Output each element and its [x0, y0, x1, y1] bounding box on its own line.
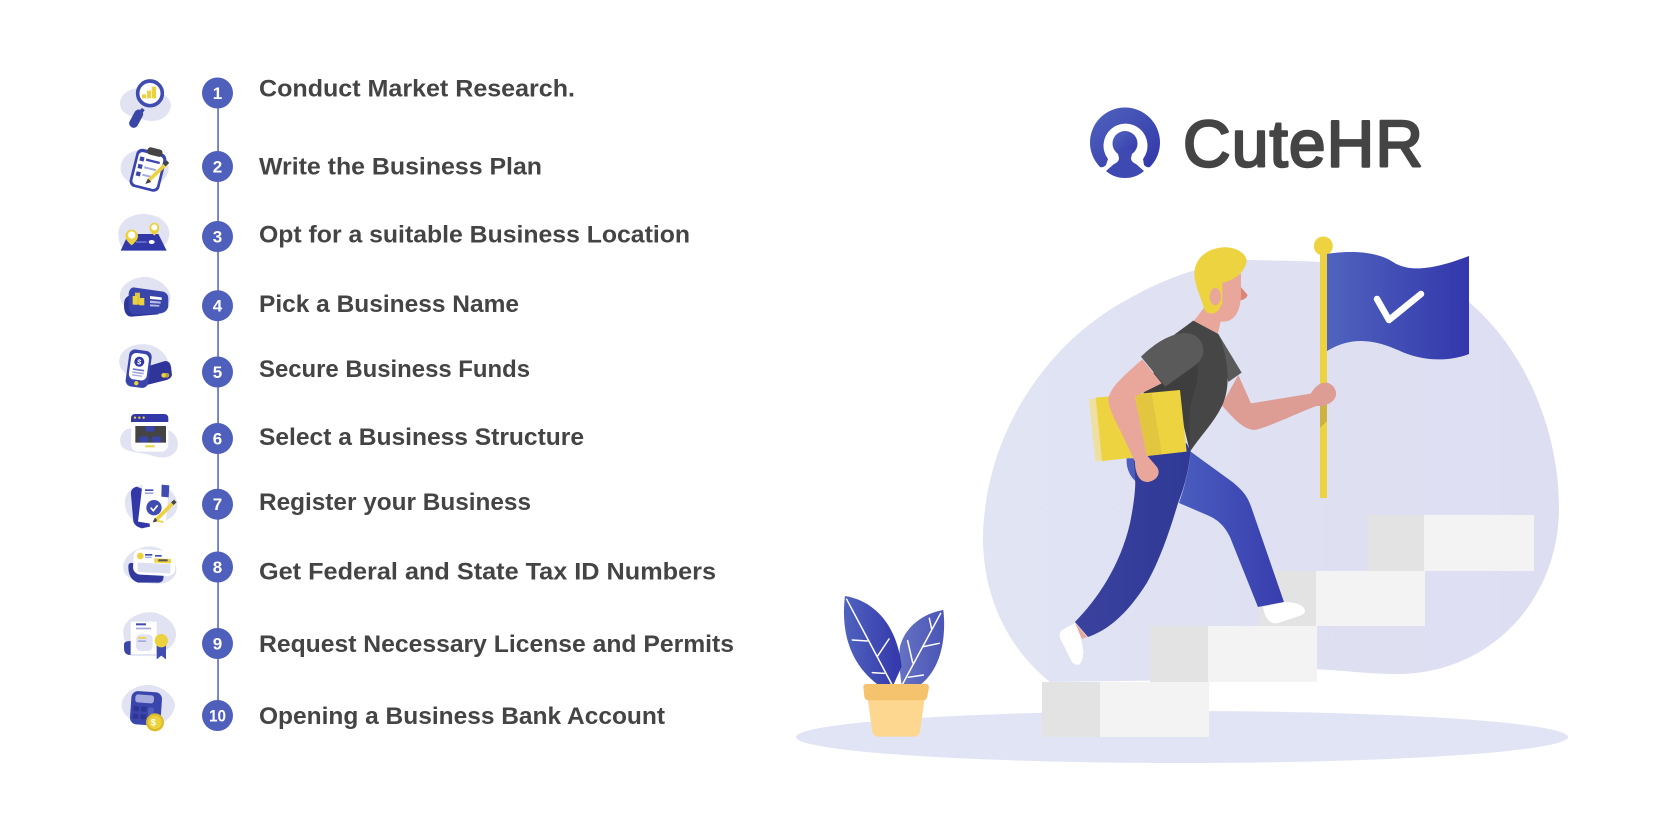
icon: business card [120, 277, 171, 317]
icon: clipboard and pencil [121, 144, 169, 193]
front sleeve [1141, 333, 1203, 387]
label 5: Secure Business Funds [259, 356, 530, 383]
potted plant [844, 596, 944, 737]
ear [1210, 288, 1221, 305]
number 8 [202, 552, 233, 582]
label 1: Conduct Market Research. [259, 76, 575, 102]
number 7 [202, 489, 233, 520]
ankle [1075, 623, 1087, 639]
icon: map with pins [118, 214, 169, 251]
front arm [1108, 359, 1162, 482]
number 1 [202, 78, 233, 108]
number 3 [202, 221, 233, 252]
front leg [1075, 443, 1191, 637]
number 4 [202, 290, 233, 321]
number 10 [202, 700, 233, 731]
number 5: 5 [213, 363, 222, 382]
hip accent [1127, 458, 1140, 482]
logo: CuteHR [1090, 106, 1423, 180]
ground ellipse [796, 711, 1568, 763]
icon: phone payment and wallet: $ [137, 357, 142, 367]
step 3 [118, 214, 690, 252]
icon: ID cards [123, 546, 176, 584]
torso [1143, 321, 1228, 452]
right shoe [1263, 602, 1305, 623]
number 5 [202, 356, 233, 388]
label 8: Get Federal and State Tax ID Numbers [259, 558, 716, 586]
number 7: 7 [213, 495, 222, 514]
icon: browser window [120, 414, 178, 458]
box [1089, 398, 1102, 461]
nose [1239, 286, 1248, 301]
number 8: 8 [213, 558, 222, 577]
number 6: 6 [213, 430, 222, 448]
label 9: Request Necessary License and Permits [259, 631, 734, 658]
step 1 [120, 76, 575, 123]
logo mark [1090, 108, 1160, 178]
label 7: Register your Business [259, 489, 531, 516]
icon: phone payment and wallet [119, 344, 172, 389]
label 3: Opt for a suitable Business Location [259, 222, 690, 248]
running person [1060, 247, 1336, 665]
logo wordmark: CuteHR [1183, 106, 1423, 180]
number 9: 9 [213, 634, 222, 654]
number 3: 3 [213, 228, 222, 246]
number 4: 4 [213, 297, 223, 316]
step 9 [123, 612, 734, 659]
rear sleeve [1218, 334, 1242, 382]
step 4 [120, 277, 519, 321]
number 2 [202, 151, 233, 182]
step 5 [119, 344, 530, 389]
icon: certificate with medal [123, 612, 176, 659]
flag [1314, 236, 1469, 498]
step 7 [125, 483, 531, 528]
number 9 [202, 628, 233, 659]
icon: calculator and coin: $ [151, 718, 157, 728]
timeline line [217, 93, 219, 716]
number 10: 10 [209, 706, 226, 726]
label 6: Select a Business Structure [259, 424, 584, 451]
icon: document with check and pencil [125, 483, 177, 528]
stairs [1042, 515, 1534, 737]
back leg [1179, 452, 1284, 607]
step 10 [122, 685, 665, 731]
hair [1194, 247, 1247, 314]
back arm [1222, 375, 1336, 430]
left shoe [1060, 623, 1083, 665]
head and neck [1193, 273, 1241, 336]
step 8 [123, 546, 716, 586]
number 1: 1 [213, 84, 222, 103]
step 6 [120, 414, 584, 458]
steps list [118, 76, 734, 731]
background blob [983, 260, 1559, 682]
label 2: Write the Business Plan [259, 154, 542, 180]
number 2: 2 [213, 158, 222, 176]
label 10: Opening a Business Bank Account [259, 703, 665, 730]
icon: calculator and coin [122, 685, 175, 731]
illustration [796, 236, 1568, 763]
icon: magnifier with bar chart [120, 81, 171, 123]
step 2 [121, 144, 542, 193]
label 4: Pick a Business Name [259, 291, 519, 318]
number 6 [202, 423, 233, 454]
